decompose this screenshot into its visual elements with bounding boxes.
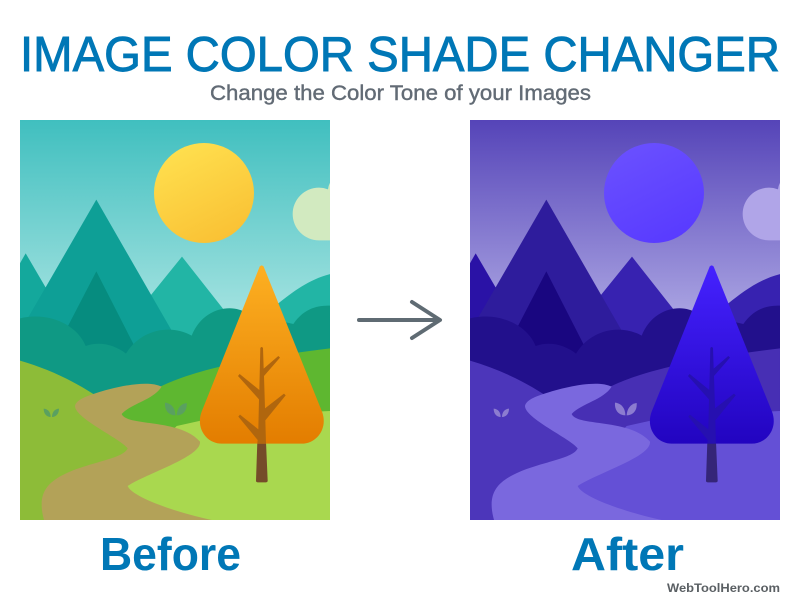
watermark: WebToolHero.com	[667, 581, 780, 595]
tree canopy	[650, 265, 774, 444]
tree branches	[688, 347, 736, 443]
cloud	[743, 180, 782, 240]
small leaf plant	[44, 409, 59, 417]
title: IMAGE COLOR SHADE CHANGER	[20, 28, 780, 82]
small leaf plant	[494, 409, 509, 417]
panel: after image	[463, 120, 783, 520]
bushes	[20, 306, 330, 394]
tree branches	[238, 347, 286, 443]
far left mountain	[470, 254, 496, 318]
sun	[154, 143, 254, 243]
tree trunk	[256, 442, 268, 482]
panel: before image	[13, 120, 333, 520]
winding road	[42, 384, 212, 520]
middle green hill	[113, 348, 330, 430]
tree canopy	[200, 265, 324, 444]
large mountain	[479, 200, 621, 344]
right mountain and hill	[151, 256, 330, 336]
right mountain and hill	[601, 256, 780, 336]
sun	[604, 143, 704, 243]
large leaf plant	[615, 403, 637, 415]
subtitle: Change the Color Tone of your Images	[210, 82, 591, 105]
middle hill	[563, 348, 780, 430]
left green hill	[20, 360, 128, 520]
sky	[470, 120, 780, 311]
sky	[20, 120, 330, 311]
bushes	[470, 306, 780, 394]
inner mountain peak	[68, 272, 134, 354]
large leaf plant	[165, 403, 187, 415]
winding river	[492, 384, 662, 520]
cloud	[293, 180, 332, 240]
large mountain	[29, 200, 171, 344]
foreground right meadow	[567, 411, 780, 520]
far left mountain	[20, 254, 46, 318]
label: before: Before	[100, 528, 241, 580]
foreground right meadow	[117, 411, 330, 520]
tree trunk	[706, 442, 718, 482]
inner mountain peak	[518, 272, 584, 354]
left hill	[470, 360, 578, 520]
arrow	[359, 302, 440, 338]
label: after: After	[571, 528, 684, 580]
